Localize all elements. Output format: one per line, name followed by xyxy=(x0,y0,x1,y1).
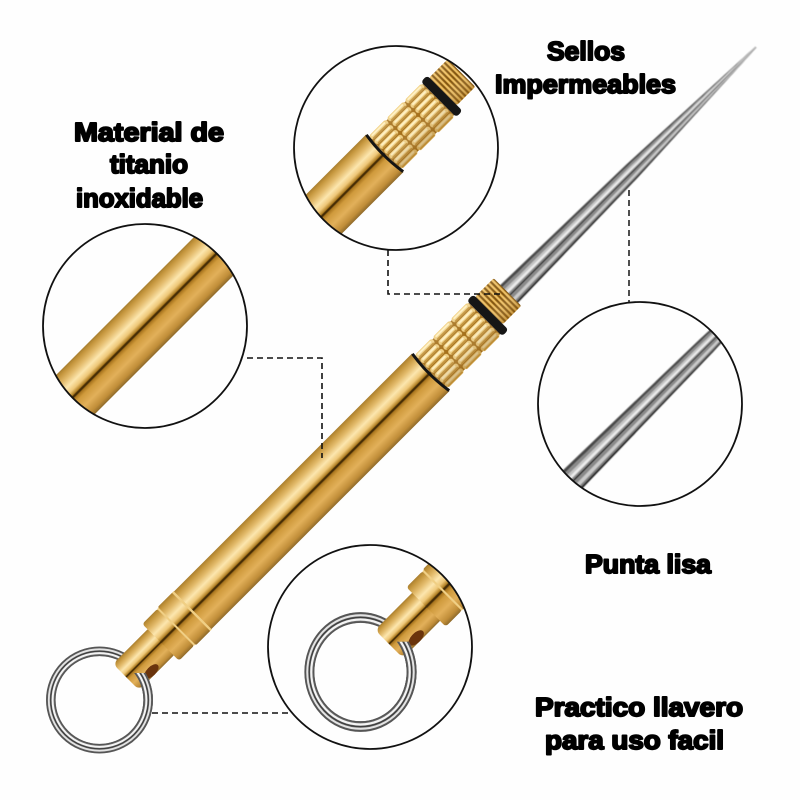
gold body xyxy=(107,275,528,696)
heading: Punta lisa: Punta lisa xyxy=(585,549,712,579)
heading: Practico llavero para uso facil: Practico llavero xyxy=(535,692,743,722)
heading: Material de titanio inoxidable xyxy=(74,117,224,213)
heading: Material de titanio inoxidable: Material de xyxy=(74,117,224,147)
circle detail: titanium body xyxy=(42,223,248,429)
heading: Practico llavero para uso facil xyxy=(535,692,743,755)
heading: Material de titanio inoxidable: inoxidable xyxy=(76,183,203,213)
leader: keyring xyxy=(152,712,292,714)
heading: Sellos Impermeables: Sellos xyxy=(547,36,625,66)
leader: waterproof seals xyxy=(388,250,500,294)
leader: smooth tip xyxy=(628,190,630,303)
heading: Sellos Impermeables xyxy=(495,36,676,99)
circle detail: waterproof seals xyxy=(293,45,499,251)
heading: Material de titanio inoxidable: titanio xyxy=(110,149,188,179)
heading: Sellos Impermeables: Impermeables xyxy=(495,69,676,99)
icon: metal key ring xyxy=(47,647,152,753)
key ring front section through the hole xyxy=(130,673,153,733)
spike tip xyxy=(500,38,765,303)
heading: Practico llavero para uso facil: para uso facil xyxy=(545,725,724,755)
circle detail: smooth tip xyxy=(537,301,743,507)
circle detail: keyring xyxy=(267,544,473,750)
leader: titanium material xyxy=(247,358,322,458)
